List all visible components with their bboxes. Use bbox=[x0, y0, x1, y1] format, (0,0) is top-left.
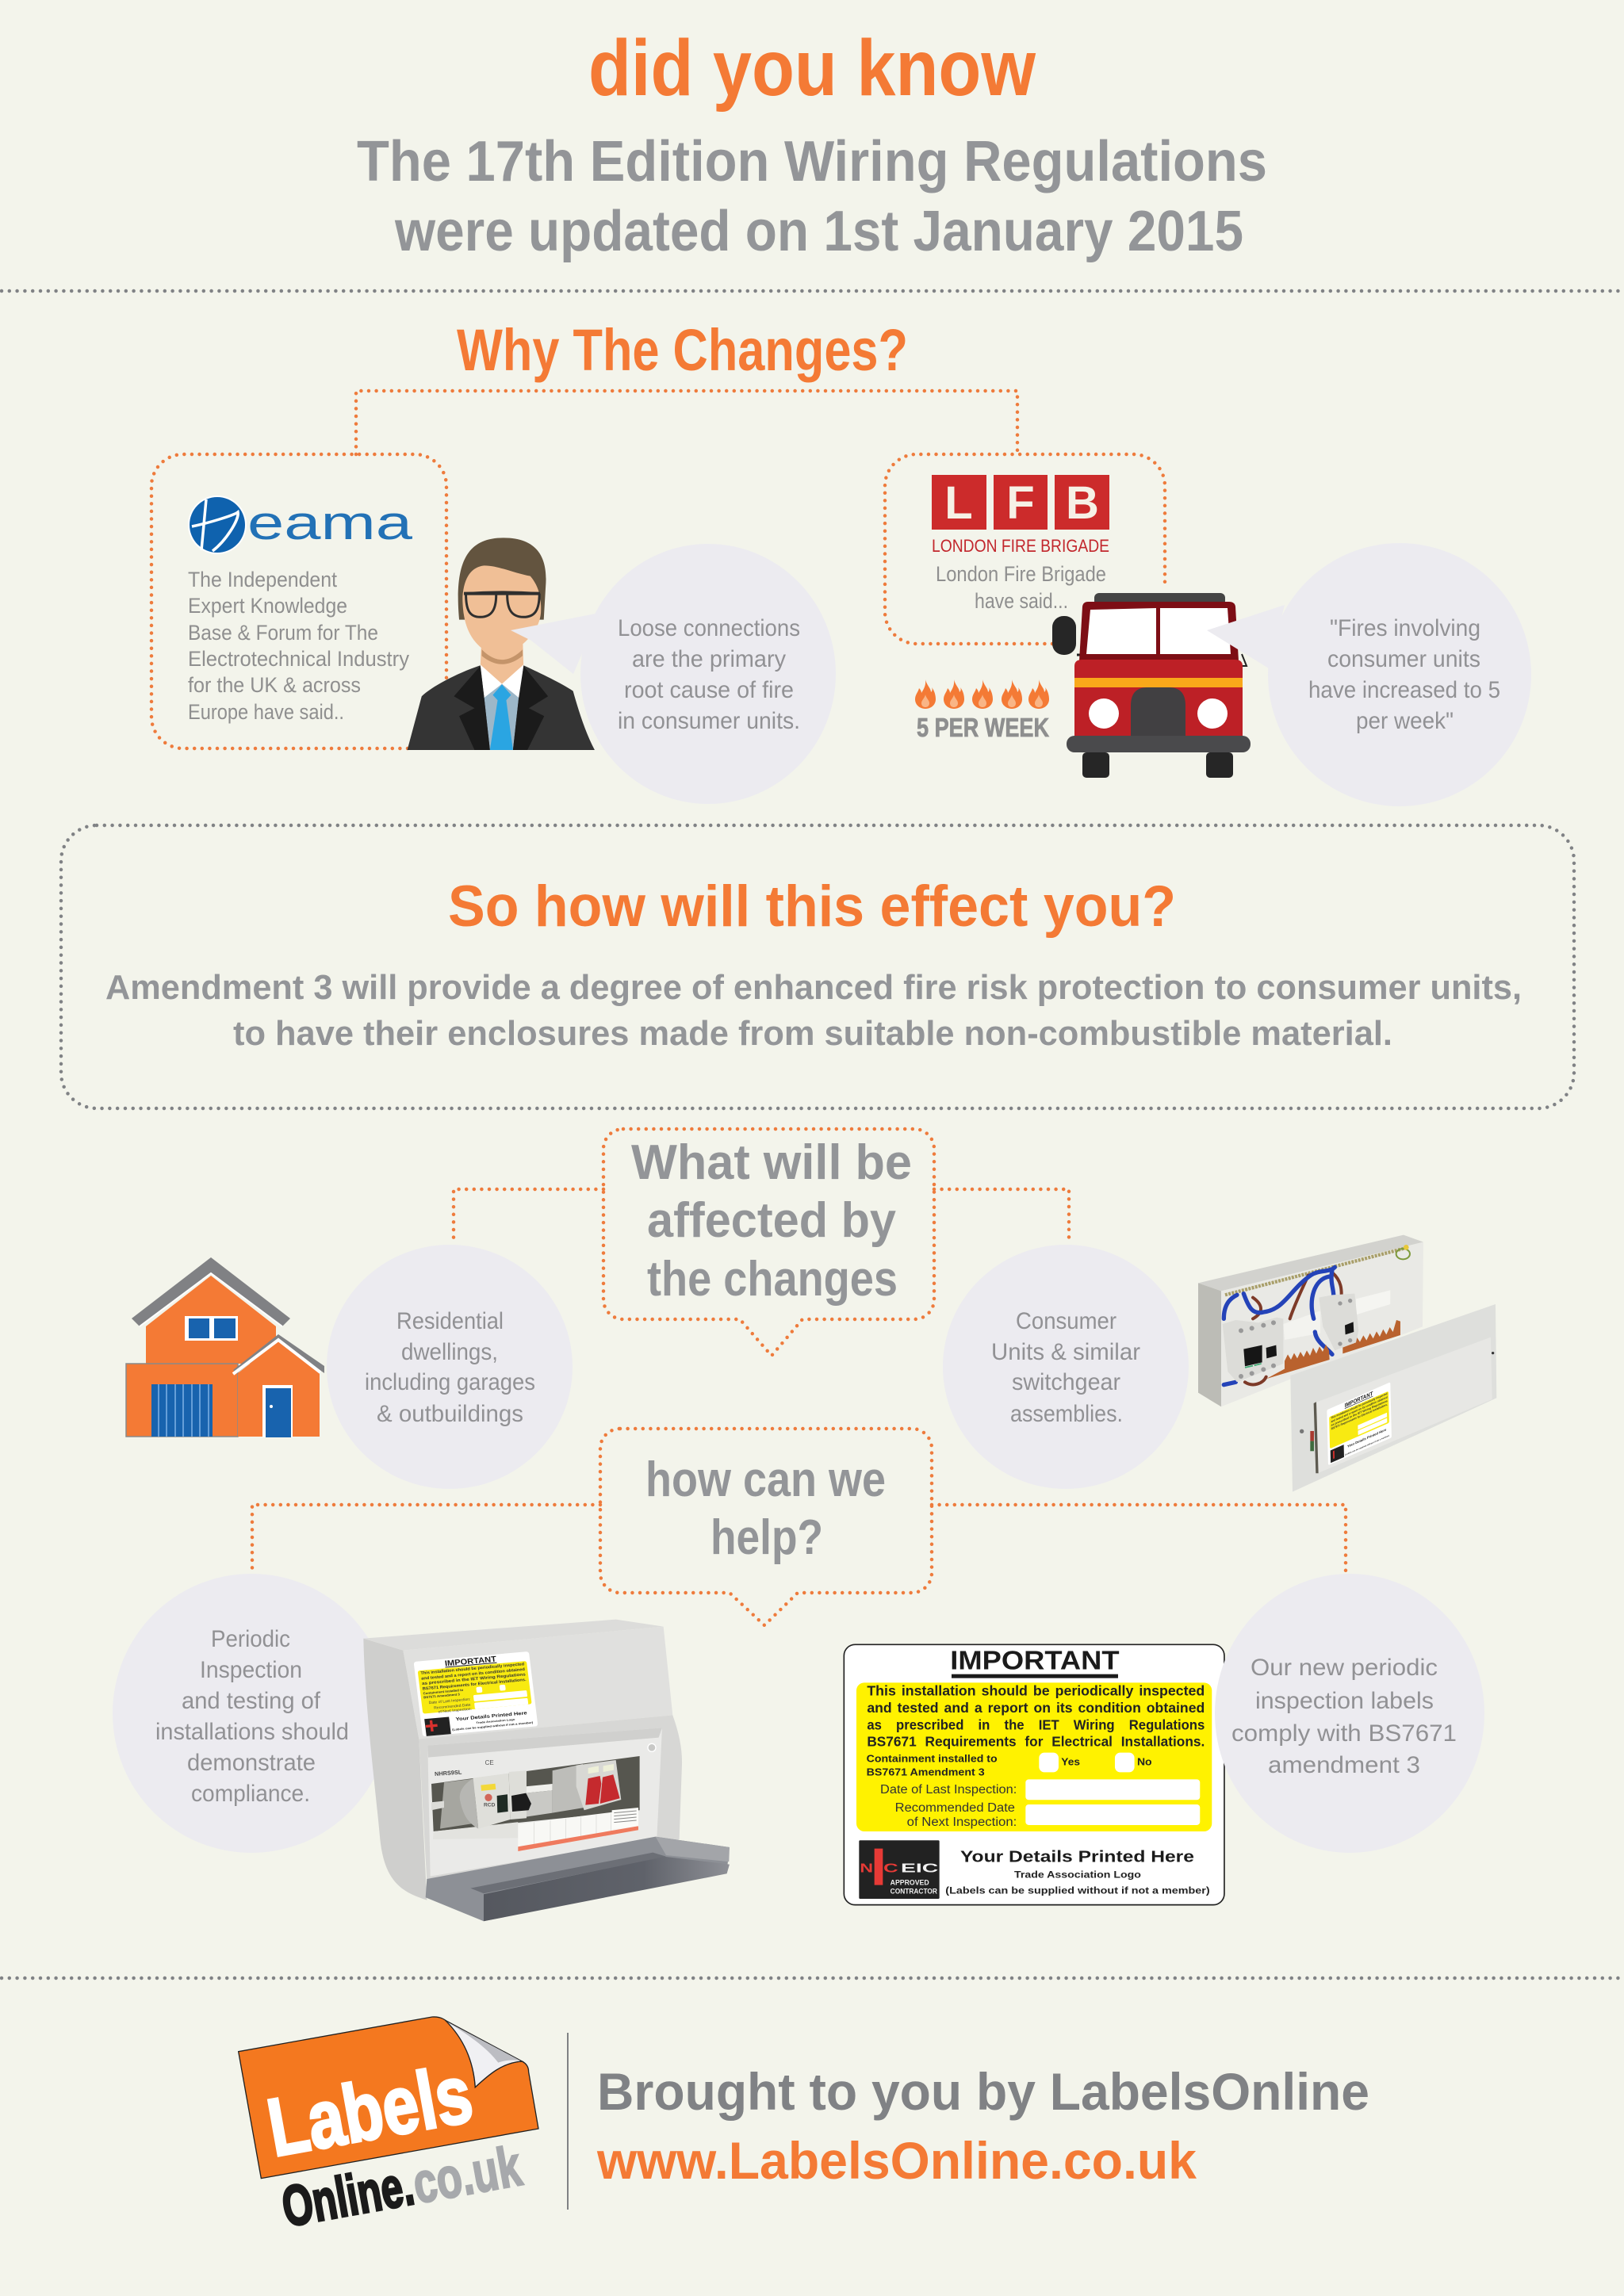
icon: LFB logo bbox=[932, 475, 1109, 556]
title: did you know bbox=[588, 24, 1036, 113]
callout: what will be affected: What will be bbox=[631, 1135, 912, 1190]
beama description: Europe have said.. bbox=[188, 700, 344, 724]
bubble text: residential: including garages bbox=[365, 1369, 535, 1395]
bubble text: loose connections bbox=[618, 615, 800, 734]
bubble text: loose connections: root cause of fire bbox=[624, 677, 794, 703]
bubble text: fires: have increased to 5 bbox=[1308, 677, 1500, 703]
sticker on unit: Your Details Printed Here bbox=[455, 1711, 528, 1722]
bubble text: periodic labels: comply with BS7671 bbox=[1231, 1720, 1457, 1747]
icon: businessman bbox=[408, 538, 595, 750]
speech circle: residential bbox=[327, 1245, 573, 1489]
body text: amendment 3: Amendment 3 will provide a degree of enhanced fire risk protection to consumer units, bbox=[105, 968, 1522, 1007]
heading: effect: So how will this effect you? bbox=[448, 874, 1176, 939]
image: periodic inspection label: BS7671 Amendment 3 bbox=[867, 1766, 985, 1777]
body text: amendment 3: to have their enclosures made from suitable non-combustible material. bbox=[233, 1014, 1392, 1053]
stat: 5 per week: 5 PER WEEK bbox=[917, 713, 1049, 742]
bubble text: residential bbox=[365, 1308, 535, 1427]
bubble text: periodic labels: amendment 3 bbox=[1268, 1752, 1420, 1778]
icon: house bbox=[126, 1257, 324, 1437]
connector dots: what will be affected bbox=[454, 1189, 603, 1245]
image: periodic inspection label: BS7671 Requirements for Electrical Installations. bbox=[867, 1734, 1205, 1750]
image: consumer unit with open lid: RCD bbox=[484, 1802, 496, 1808]
icon: beama logo: eama bbox=[247, 496, 413, 549]
image: periodic inspection label: C bbox=[883, 1862, 898, 1875]
bubble text: loose connections: are the primary bbox=[632, 646, 786, 672]
sticker on metal unit: IMPORTANT bbox=[1345, 1391, 1373, 1409]
beama description bbox=[188, 568, 409, 724]
bubble text: periodic inspection: and testing of bbox=[182, 1688, 321, 1714]
bubble text: periodic labels: inspection labels bbox=[1255, 1688, 1434, 1714]
image: periodic inspection label: EIC bbox=[901, 1862, 938, 1875]
bubble text: residential: Residential bbox=[396, 1308, 504, 1334]
image: periodic inspection label: APPROVED bbox=[891, 1878, 929, 1886]
image: periodic inspection label: Date of Last Inspection: bbox=[880, 1783, 1017, 1797]
panel: so how will this effect you bbox=[61, 825, 1574, 1108]
image: consumer unit with open lid bbox=[363, 1620, 730, 1921]
beama description: for the UK & across bbox=[188, 673, 361, 697]
icon: LFB logo: F bbox=[1006, 477, 1035, 529]
footer text: brought to you by: www.LabelsOnline.co.uk bbox=[596, 2131, 1197, 2190]
image: periodic inspection label: N bbox=[860, 1862, 873, 1875]
sticker on unit: BS7671 Requirements for Electrical Installations. bbox=[423, 1678, 527, 1692]
beama description: Expert Knowledge bbox=[188, 594, 347, 618]
sticker on metal unit bbox=[1327, 1382, 1392, 1465]
lfb description: London Fire Brigade bbox=[936, 562, 1106, 586]
sticker on unit: Date of Last Inspection: bbox=[428, 1697, 471, 1705]
subtitle: The 17th Edition Wiring Regulations bbox=[357, 130, 1267, 193]
callout: how can we help: help? bbox=[710, 1510, 823, 1565]
sticker on metal unit: (Labels can be supplied without if not a member) bbox=[1345, 1434, 1389, 1456]
icon: flames bbox=[915, 679, 1049, 709]
bubble text: residential: & outbuildings bbox=[377, 1401, 523, 1427]
image: periodic inspection label: CONTRACTOR bbox=[891, 1888, 937, 1896]
bubble text: loose connections: in consumer units. bbox=[618, 708, 800, 734]
bubble text: fires: consumer units bbox=[1327, 646, 1480, 672]
sticker on unit: This installation should be periodically inspected bbox=[420, 1662, 525, 1676]
sticker on unit: Recommended Date bbox=[434, 1702, 471, 1710]
callout: how can we help: how can we bbox=[645, 1452, 886, 1507]
sticker on metal unit: BS7671 Requirements for Electrical Installations. bbox=[1331, 1402, 1388, 1431]
sticker on unit: Containment installed to bbox=[423, 1688, 464, 1695]
bubble text: periodic inspection: demonstrate bbox=[187, 1750, 316, 1776]
image: periodic inspection label: IMPORTANT bbox=[950, 1647, 1120, 1676]
sticker on unit bbox=[414, 1651, 538, 1736]
logo: labels online: co.uk bbox=[408, 2134, 526, 2216]
sticker on unit: as prescribed in the IET Wiring Regulations bbox=[422, 1672, 526, 1686]
callout: what will be affected: affected by bbox=[647, 1193, 896, 1248]
image: periodic inspection label: Containment installed to bbox=[867, 1752, 998, 1764]
sticker on unit: Trade Association Logo bbox=[476, 1718, 515, 1724]
bubble text: fires: "Fires involving bbox=[1330, 615, 1480, 641]
footer text: brought to you by bbox=[596, 2062, 1369, 2190]
beama description: The Independent bbox=[188, 568, 337, 591]
image: periodic inspection label: of Next Inspection: bbox=[907, 1816, 1017, 1829]
sticker on unit: and tested and a report on its condition obtained bbox=[421, 1667, 525, 1682]
image: periodic inspection label: (Labels can be supplied without if not a member) bbox=[945, 1885, 1210, 1896]
speech circle: periodic labels bbox=[1215, 1574, 1484, 1853]
image: periodic inspection label: Recommended Date bbox=[895, 1801, 1015, 1815]
heading: why the changes: Why The Changes? bbox=[457, 317, 908, 383]
callout: what will be affected: the changes bbox=[647, 1252, 898, 1307]
speech circle: periodic inspection bbox=[113, 1574, 390, 1853]
subtitle bbox=[357, 130, 1267, 263]
beama description: Base & Forum for The bbox=[188, 621, 378, 645]
logo: labels online: Online. bbox=[278, 2153, 419, 2239]
icon: LFB logo: LONDON FIRE BRIGADE bbox=[932, 536, 1109, 556]
body text: amendment 3 bbox=[105, 968, 1522, 1053]
panel: London Fire Brigade bbox=[885, 454, 1165, 644]
connector dots: how can we help bbox=[252, 1505, 600, 1574]
lfb description bbox=[936, 562, 1106, 613]
lfb description: have said... bbox=[975, 589, 1068, 613]
sticker on metal unit: as prescribed in the IET Wiring Regulations bbox=[1331, 1399, 1388, 1427]
image: periodic inspection label: This installation should be periodically inspected bbox=[867, 1683, 1205, 1699]
sticker on metal unit: Your Details Printed Here bbox=[1347, 1427, 1387, 1448]
image: periodic inspection label: Yes bbox=[1061, 1756, 1080, 1768]
callout: what will be affected bbox=[603, 1129, 934, 1356]
image: periodic inspection label: Your Details Printed Here bbox=[960, 1848, 1194, 1866]
speech bubble: fires involving bbox=[1207, 543, 1531, 806]
speech circle: consumer units bbox=[943, 1245, 1189, 1489]
sticker on metal unit: This installation should be periodically inspected bbox=[1331, 1392, 1388, 1420]
bubble text: periodic labels bbox=[1231, 1655, 1457, 1778]
bubble text: fires bbox=[1308, 615, 1500, 734]
image: periodic inspection label: Trade Association Logo bbox=[1014, 1869, 1141, 1880]
sticker on metal unit: and tested and a report on its condition obtained bbox=[1331, 1395, 1388, 1424]
callout: how can we help bbox=[600, 1429, 932, 1625]
beama description: Electrotechnical Industry bbox=[188, 647, 409, 671]
icon: fire engine bbox=[1052, 593, 1262, 778]
image: consumer unit with open lid: NHRS9SL bbox=[435, 1769, 462, 1777]
subtitle: were updated on 1st January 2015 bbox=[394, 200, 1243, 263]
bubble text: consumer units: assemblies. bbox=[1010, 1401, 1123, 1427]
panel: BEAMA bbox=[151, 454, 446, 748]
sticker on unit: of Next Inspection: bbox=[438, 1707, 472, 1714]
bubble text: periodic labels: Our new periodic bbox=[1251, 1655, 1438, 1681]
logo: labels online: Labels bbox=[261, 2047, 479, 2174]
image: periodic inspection label: No bbox=[1137, 1756, 1152, 1768]
image: periodic inspection label: as prescribed in the IET Wiring Regulations bbox=[867, 1716, 1205, 1732]
icon: LFB logo: B bbox=[1066, 477, 1099, 529]
bubble text: fires: per week" bbox=[1356, 708, 1454, 734]
icon: beama logo bbox=[188, 496, 413, 554]
sticker on unit: BS7671 Amendment 3 bbox=[423, 1692, 461, 1699]
sticker on unit: IMPORTANT bbox=[444, 1655, 498, 1668]
bubble text: consumer units: Units & similar bbox=[991, 1339, 1140, 1365]
bubble text: periodic inspection: Periodic bbox=[211, 1626, 290, 1652]
image: metal consumer unit bbox=[1198, 1235, 1496, 1492]
bubble text: consumer units: switchgear bbox=[1012, 1369, 1120, 1395]
footer text: brought to you by: Brought to you by LabelsOnline bbox=[597, 2062, 1369, 2121]
logo: labels online bbox=[239, 2017, 538, 2239]
bubble text: periodic inspection: installations should bbox=[155, 1719, 349, 1745]
image: periodic inspection label bbox=[844, 1644, 1224, 1905]
bubble text: loose connections: Loose connections bbox=[618, 615, 800, 641]
image: consumer unit with open lid: CE bbox=[485, 1759, 494, 1766]
bubble text: residential: dwellings, bbox=[401, 1339, 498, 1365]
speech bubble: loose connections bbox=[580, 544, 836, 804]
bubble text: consumer units bbox=[991, 1308, 1140, 1427]
bubble text: periodic inspection: Inspection bbox=[200, 1657, 302, 1683]
icon: LFB logo: L bbox=[944, 477, 973, 529]
bubble text: periodic inspection: compliance. bbox=[191, 1781, 310, 1807]
sticker on unit: (Labels can be supplied without if not a member) bbox=[452, 1721, 533, 1732]
bubble text: periodic inspection bbox=[155, 1626, 349, 1807]
image: periodic inspection label: and tested and a report on its condition obtained bbox=[867, 1700, 1205, 1716]
bubble text: consumer units: Consumer bbox=[1016, 1308, 1116, 1334]
